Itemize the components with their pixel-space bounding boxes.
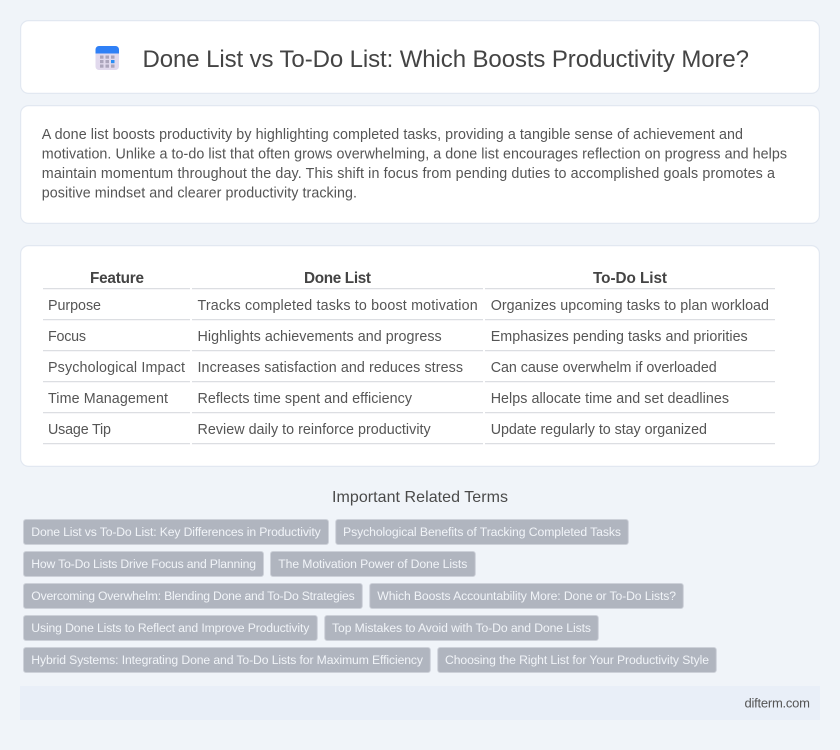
table row: purpose xyxy=(43,298,775,320)
table row: usage tip: Usage Tip xyxy=(48,422,111,438)
table row: time management: Reflects time spent and efficiency xyxy=(198,391,413,407)
heading: important related terms: Important Related Terms xyxy=(332,489,508,506)
tag xyxy=(24,616,317,640)
tag: Done List vs To-Do List: Key Differences in Productivity xyxy=(31,525,322,539)
table row: time management xyxy=(43,391,775,413)
table row: focus: Focus xyxy=(48,329,86,345)
table row: purpose: Tracks completed tasks to boost motivation xyxy=(198,298,478,314)
tag xyxy=(24,552,264,576)
footer brand text: difterm.com xyxy=(744,696,810,710)
tag xyxy=(370,584,683,608)
table row: time management: Helps allocate time and set deadlines xyxy=(491,391,729,407)
text block: intro paragraph xyxy=(42,127,787,202)
panel: comparison table xyxy=(21,246,819,466)
table header row: Feature xyxy=(90,270,144,287)
tag: Hybrid Systems: Integrating Done and To-Do Lists for Maximum Efficiency xyxy=(31,653,424,667)
table row: time management: Time Management xyxy=(48,391,168,407)
tag xyxy=(325,616,598,640)
table row: focus: Emphasizes pending tasks and priorities xyxy=(491,329,748,345)
panel: introduction xyxy=(21,106,819,223)
tag xyxy=(336,520,628,544)
tag: How To-Do Lists Drive Focus and Planning xyxy=(31,557,256,571)
text block: intro paragraph: maintain momentum throughout the day. This shift in focus from pending duties to accomplished goals promotes a xyxy=(42,166,775,182)
table row: psychological impact xyxy=(43,360,775,382)
tag: Choosing the Right List for Your Productivity Style xyxy=(445,653,709,667)
icon: calendar xyxy=(96,46,119,70)
title: Done List vs To-Do List: Which Boosts Productivity More? xyxy=(142,46,749,73)
table row: purpose: Purpose xyxy=(48,298,101,314)
table row: usage tip xyxy=(43,422,775,444)
table header row: Done List xyxy=(304,270,371,287)
table row: purpose: Organizes upcoming tasks to plan workload xyxy=(491,298,769,314)
tag: The Motivation Power of Done Lists xyxy=(278,557,467,571)
tag: Overcoming Overwhelm: Blending Done and To-Do Strategies xyxy=(31,589,355,603)
table row: usage tip: Update regularly to stay organized xyxy=(491,422,707,438)
table row: psychological impact: Psychological Impact xyxy=(48,360,185,376)
tag: Top Mistakes to Avoid with To-Do and Done Lists xyxy=(332,621,591,635)
table row: focus: Highlights achievements and progress xyxy=(198,329,442,345)
table row: psychological impact: Can cause overwhelm if overloaded xyxy=(491,360,717,376)
tag xyxy=(270,552,475,576)
footer xyxy=(20,686,820,720)
tag xyxy=(24,648,430,672)
table row: psychological impact: Increases satisfaction and reduces stress xyxy=(198,360,463,376)
table header row xyxy=(43,270,775,289)
table header row: To-Do List xyxy=(593,270,667,287)
tag: Which Boosts Accountability More: Done or To-Do Lists? xyxy=(377,589,676,603)
tag list: related terms xyxy=(24,520,716,672)
tag: Using Done Lists to Reflect and Improve Productivity xyxy=(31,621,310,635)
table row: focus xyxy=(43,329,775,351)
tag: Psychological Benefits of Tracking Completed Tasks xyxy=(343,525,621,539)
text block: intro paragraph: motivation. Unlike a to-do list that often grows overwhelming, a done list encourages reflection on progress and helps xyxy=(42,146,787,162)
text block: intro paragraph: A done list boosts productivity by highlighting completed tasks, providing a tangible sense of achievement and xyxy=(42,127,743,143)
panel: header xyxy=(21,21,819,93)
tag xyxy=(24,520,328,544)
tag xyxy=(24,584,362,608)
tag xyxy=(438,648,716,672)
table row: usage tip: Review daily to reinforce productivity xyxy=(198,422,432,438)
text block: intro paragraph: positive mindset and clearer productivity tracking. xyxy=(42,186,357,202)
